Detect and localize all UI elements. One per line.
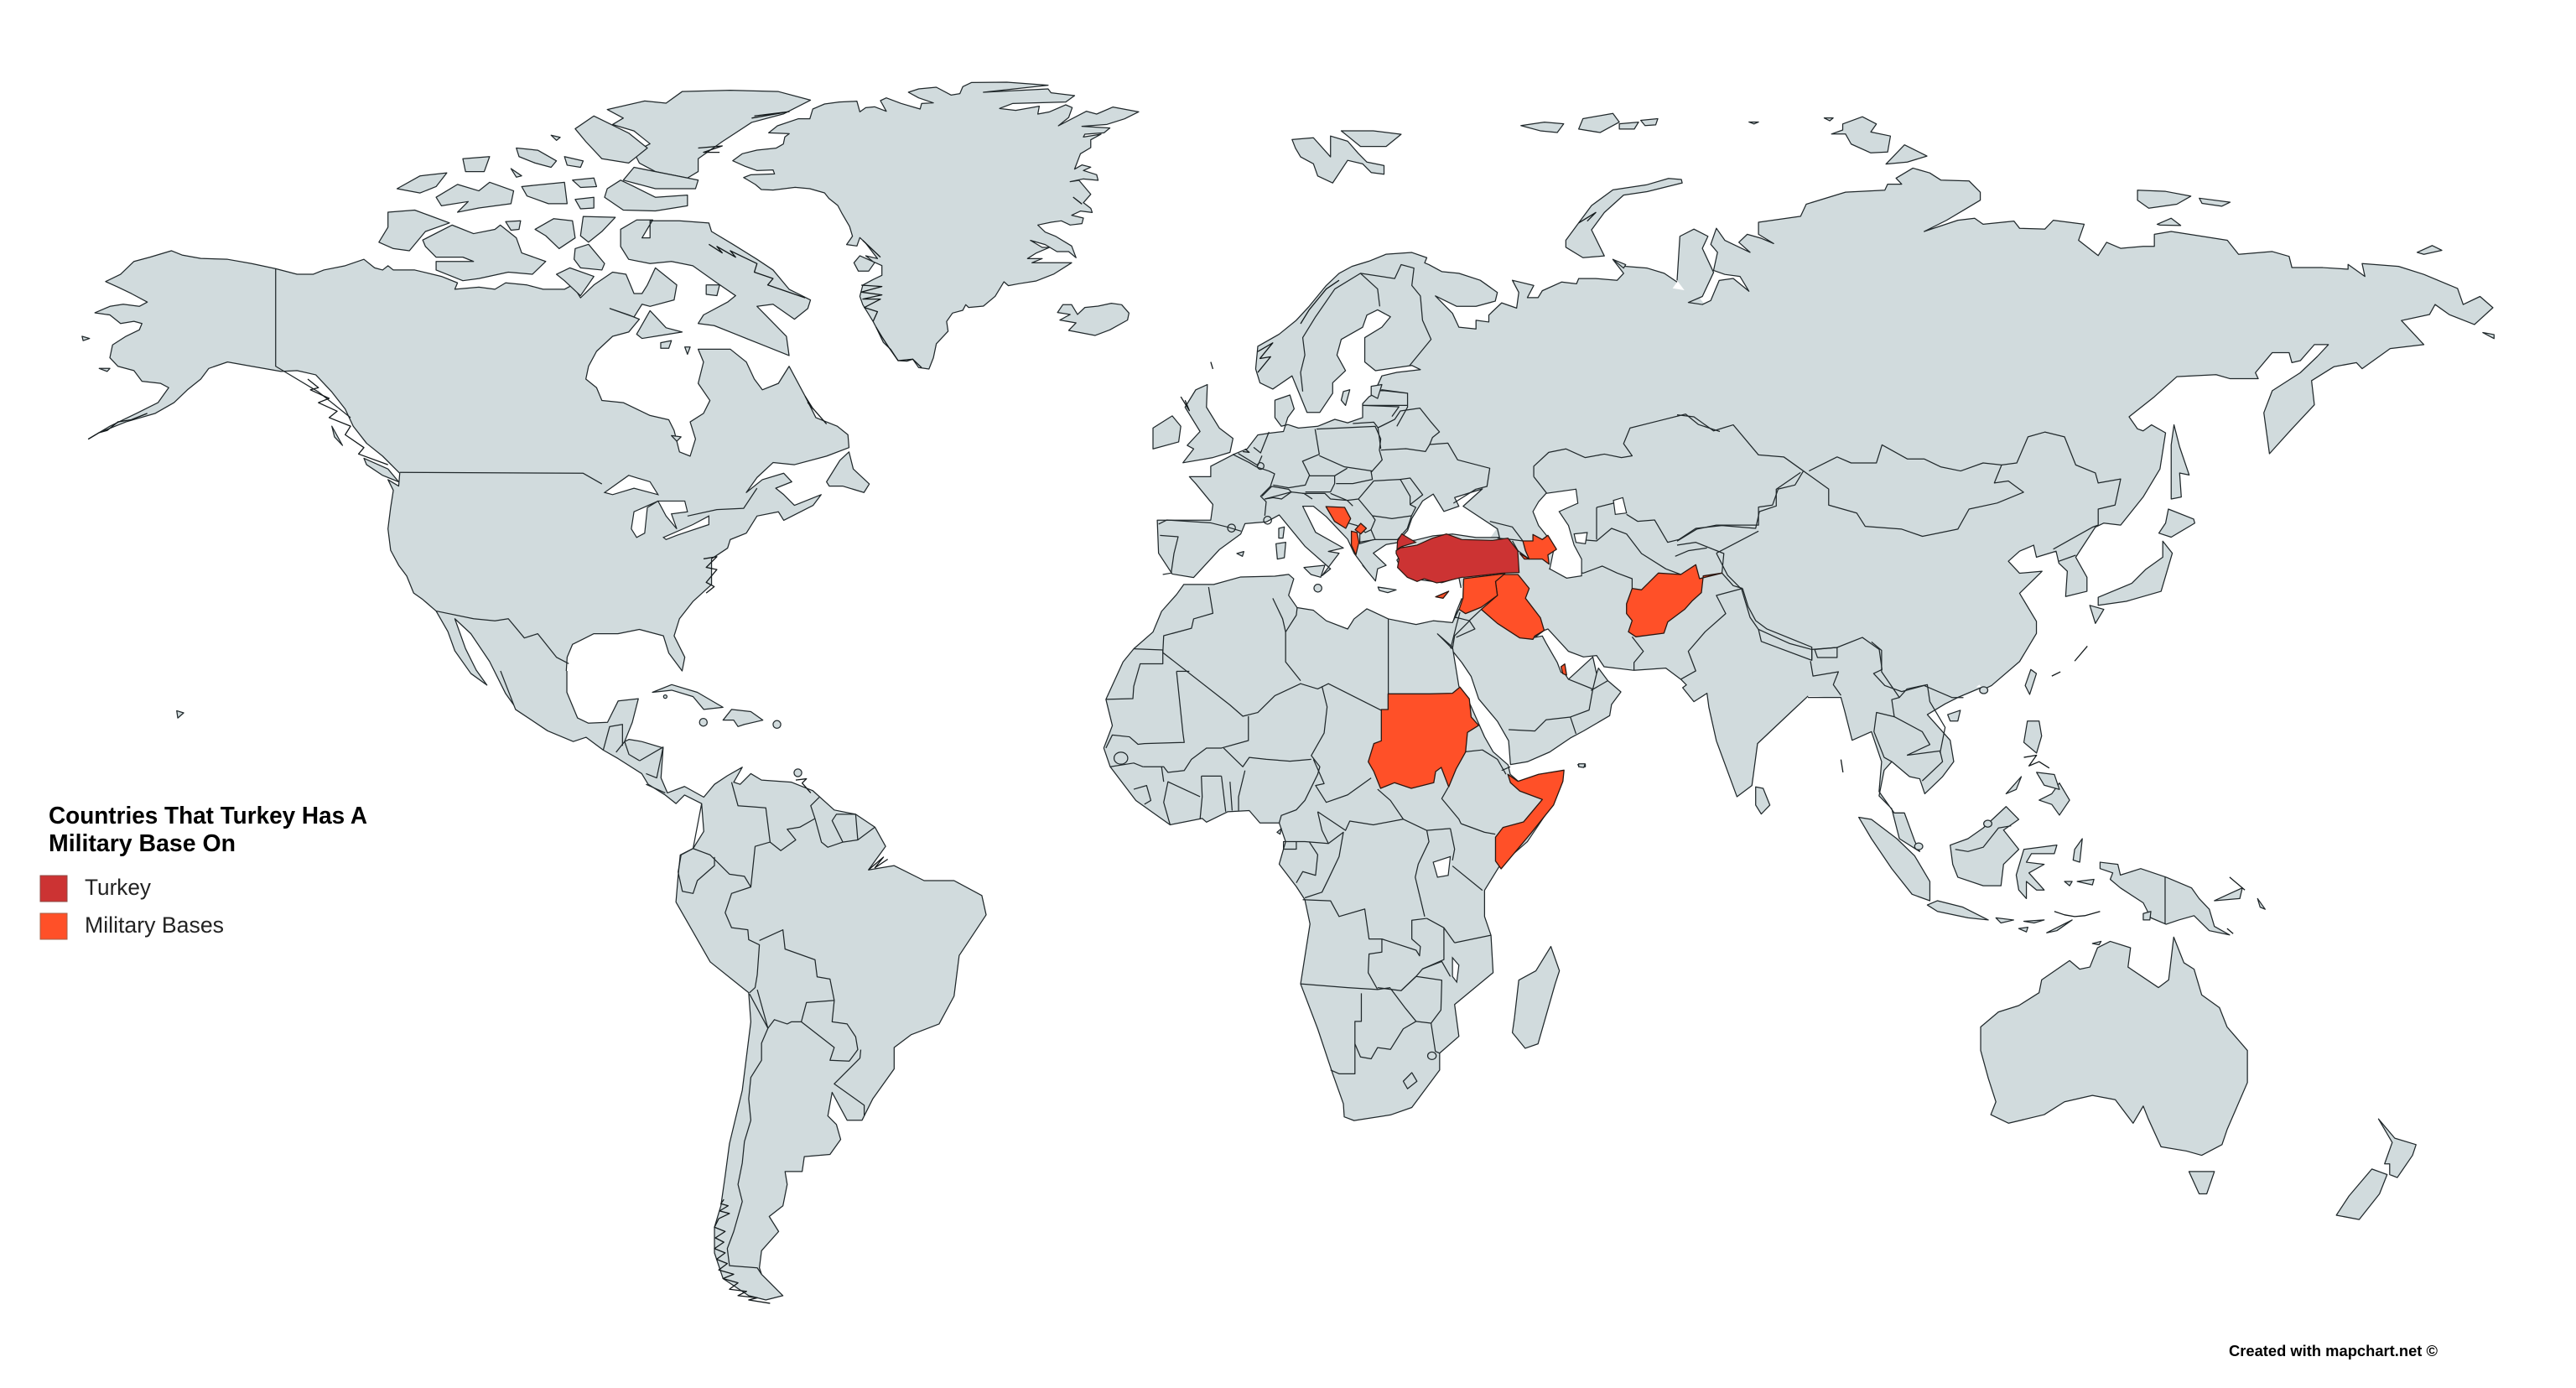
country borders: East Asia xyxy=(1677,415,2121,698)
landmass: Europe xyxy=(1153,113,1682,588)
legend item: Turkey xyxy=(40,875,151,902)
country borders: Americas xyxy=(276,268,757,663)
credit: Created with mapchart.net © xyxy=(2229,1343,2438,1359)
landmass: Mediterranean islands xyxy=(1237,527,1396,593)
Albania xyxy=(1352,531,1359,555)
country borders: Southeast Asia xyxy=(1810,642,2165,924)
landmass: North and East Asia xyxy=(1677,117,2494,694)
inland water: Great Lakes xyxy=(605,476,709,539)
coast detail: Norway and Britain xyxy=(1181,212,1596,452)
country borders: Scandinavia and Russia west xyxy=(1301,265,1720,510)
Azerbaijan xyxy=(1523,534,1556,564)
landmass: central Asia filler xyxy=(1463,289,1994,695)
Iraq xyxy=(1482,574,1544,639)
coast detail: Indonesian and Philippine islets xyxy=(1841,646,2245,933)
Bosnia and Herzegovina xyxy=(1326,507,1351,528)
coast detail: Chilean archipelago xyxy=(714,779,888,1303)
landmass: Southeast Asia and Oceania xyxy=(1808,687,2416,1219)
landmass: North America xyxy=(82,91,870,718)
highlighted country: Turkey xyxy=(1396,534,1519,583)
inland water: African lakes xyxy=(1433,856,1459,982)
legend item: Turkey: Turkey xyxy=(85,875,151,900)
Northern Cyprus xyxy=(1436,591,1449,598)
coast detail: Greenland fjords xyxy=(861,197,1082,367)
Qatar xyxy=(1561,664,1566,675)
landmass: Central and South America xyxy=(501,671,986,1300)
legend item: Military Bases: Military Bases xyxy=(85,912,224,938)
country borders: South America xyxy=(603,725,875,1274)
country borders: Africa xyxy=(1106,587,1510,1089)
legend xyxy=(40,875,224,939)
country borders: Middle East and Central Asia xyxy=(1451,472,1812,734)
Syria xyxy=(1459,574,1505,614)
Kosovo xyxy=(1355,523,1366,534)
highlighted countries: military bases xyxy=(1326,507,1722,869)
landmass: Middle East and South Asia xyxy=(1451,598,1808,814)
coast detail: Canadian fjords and Alaska panhandle xyxy=(89,112,827,593)
Afghanistan xyxy=(1627,564,1722,637)
inland water: Caspian and Aral seas xyxy=(1533,489,1627,578)
landmass: Africa and Madagascar xyxy=(1104,574,1585,1120)
title: Countries That Turkey Has A xyxy=(49,803,367,829)
Sudan xyxy=(1368,687,1478,788)
landmass: Greenland and Iceland xyxy=(733,82,1139,369)
title xyxy=(49,803,367,857)
Somalia xyxy=(1495,770,1564,869)
country borders: Europe xyxy=(1159,405,1490,574)
title: Military Base On xyxy=(49,830,236,857)
